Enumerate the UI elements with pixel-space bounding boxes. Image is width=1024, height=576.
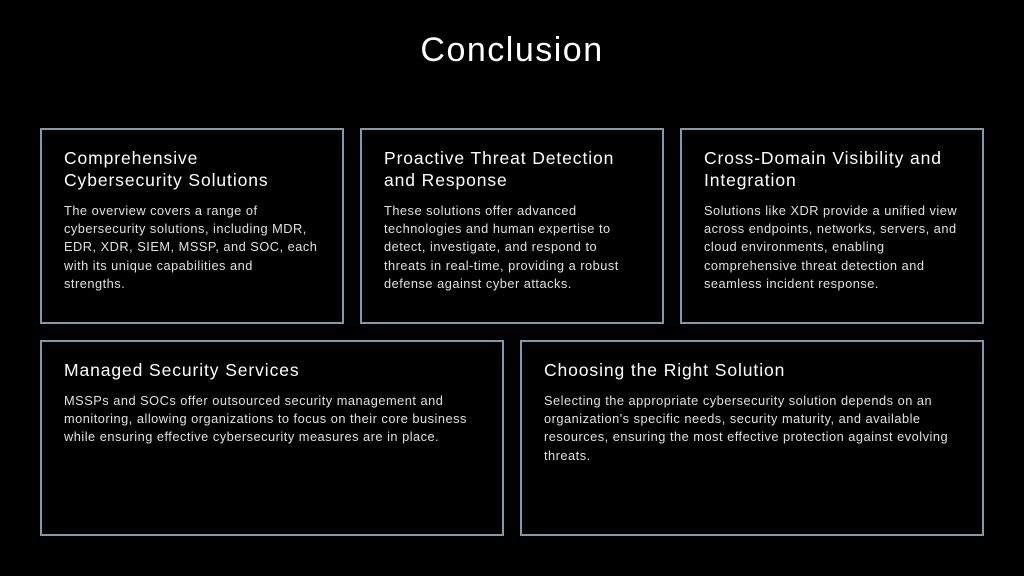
heading: Choosing the Right Solution bbox=[544, 360, 785, 380]
text block: EDR, XDR, SIEM, MSSP, and SOC, each bbox=[64, 239, 317, 254]
panel: managed security services bbox=[40, 340, 504, 536]
text block: The overview covers a range of bbox=[64, 203, 258, 218]
heading: Proactive Threat Detection bbox=[384, 148, 614, 168]
text block: detect, investigate, and respond to bbox=[384, 239, 597, 254]
text block bbox=[544, 393, 948, 463]
heading bbox=[384, 148, 614, 190]
text block: seamless incident response. bbox=[704, 276, 879, 291]
heading: and Response bbox=[384, 170, 508, 190]
text block: These solutions offer advanced bbox=[384, 203, 577, 218]
text block bbox=[704, 203, 957, 291]
text block: strengths. bbox=[64, 276, 125, 291]
panel: choosing the right solution bbox=[520, 340, 984, 536]
panel: cross-domain visibility bbox=[680, 128, 984, 324]
text block: Solutions like XDR provide a unified view bbox=[704, 203, 957, 218]
title: Conclusion bbox=[420, 31, 604, 69]
text block: with its unique capabilities and bbox=[64, 258, 253, 273]
text block: threats. bbox=[544, 448, 591, 463]
text block: across endpoints, networks, servers, and bbox=[704, 221, 957, 236]
text block: cloud environments, enabling bbox=[704, 239, 884, 254]
heading bbox=[64, 148, 269, 190]
panel: proactive threat detection bbox=[360, 128, 664, 324]
heading: Cross-Domain Visibility and bbox=[704, 148, 942, 168]
text block: Selecting the appropriate cybersecurity solution depends on an bbox=[544, 393, 932, 408]
panel: comprehensive cybersecurity solutions bbox=[40, 128, 344, 324]
text block bbox=[384, 203, 619, 291]
text block: cybersecurity solutions, including MDR, bbox=[64, 221, 307, 236]
text block: technologies and human expertise to bbox=[384, 221, 611, 236]
text block: defense against cyber attacks. bbox=[384, 276, 572, 291]
text block: MSSPs and SOCs offer outsourced security management and bbox=[64, 393, 443, 408]
text block bbox=[64, 203, 317, 291]
text block: comprehensive threat detection and bbox=[704, 258, 924, 273]
heading: Managed Security Services bbox=[64, 360, 300, 380]
text block: while ensuring effective cybersecurity measures are in place. bbox=[64, 429, 439, 444]
text block: organization's specific needs, security maturity, and available bbox=[544, 411, 921, 426]
text block: resources, ensuring the most effective protection against evolving bbox=[544, 429, 948, 444]
text block: threats in real-time, providing a robust bbox=[384, 258, 619, 273]
text block: monitoring, allowing organizations to focus on their core business bbox=[64, 411, 467, 426]
heading: Integration bbox=[704, 170, 797, 190]
heading: Cybersecurity Solutions bbox=[64, 170, 269, 190]
heading bbox=[704, 148, 942, 190]
text block bbox=[64, 393, 467, 444]
heading: Comprehensive bbox=[64, 148, 198, 168]
